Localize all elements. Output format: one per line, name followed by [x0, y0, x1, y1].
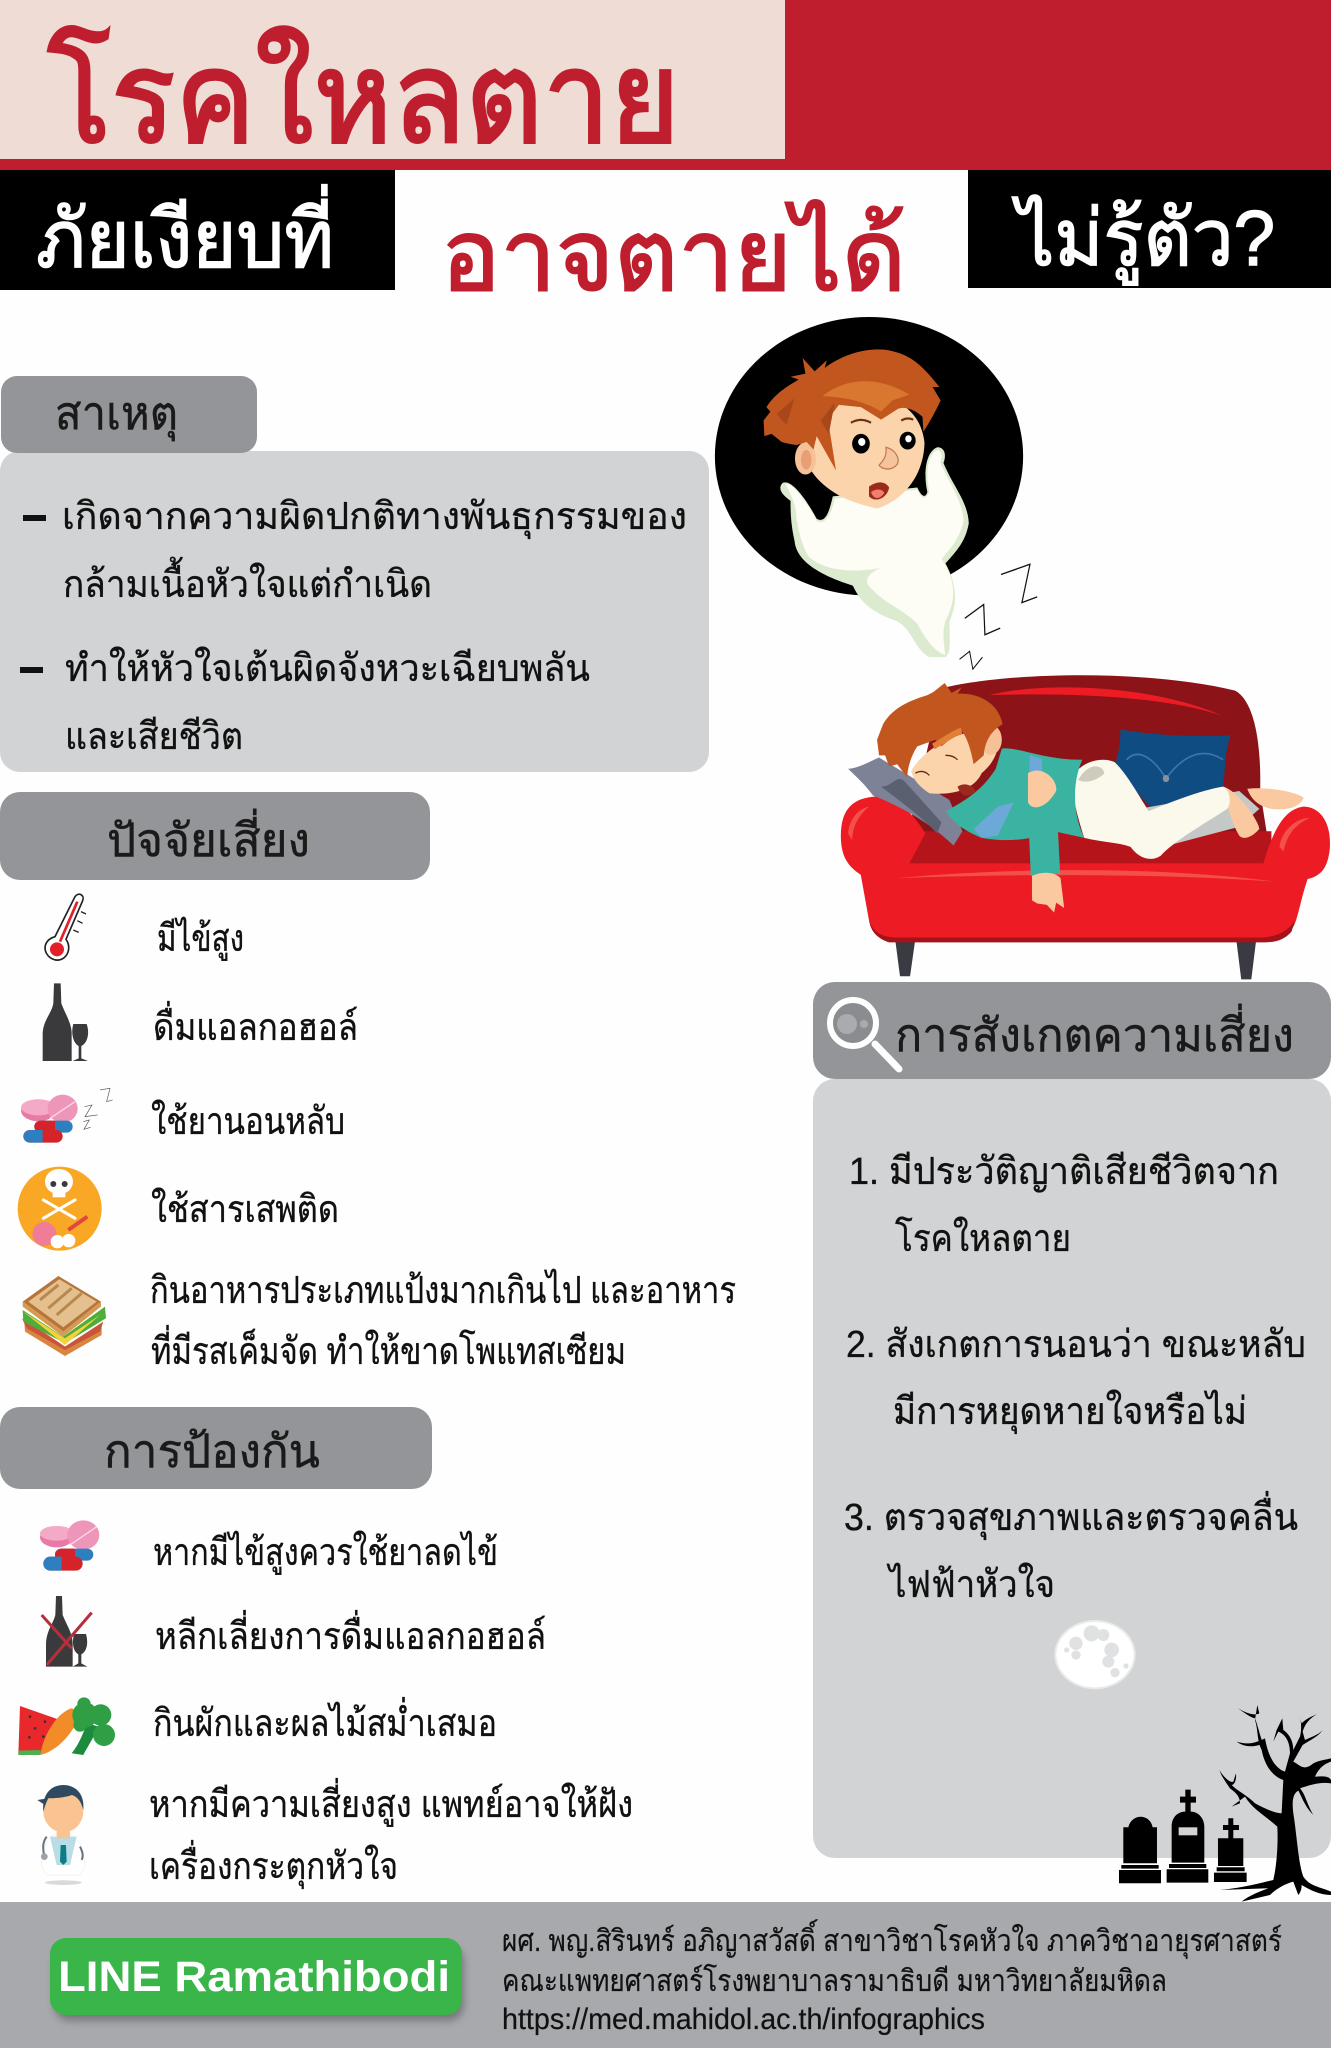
illustration: graves and dead tree	[1119, 1705, 1331, 1902]
icon: sandwich	[22, 1276, 106, 1356]
heading tab: observing risk	[813, 982, 1331, 1079]
item 1: 1. มีประวัติญาติเสียชีวิตจาก	[849, 1151, 1279, 1193]
illustration: ghost leaving head	[715, 317, 1037, 669]
title: โรคใหลตาย	[47, 27, 680, 170]
credits	[502, 1919, 1282, 2036]
risk: high fever: มีไข้สูง	[157, 917, 244, 961]
cause 1	[23, 496, 687, 606]
risk: alcohol: ดื่มแอลกอฮอล์	[153, 1001, 358, 1049]
risk: sleeping pills: ใช้ยานอนหลับ	[151, 1100, 345, 1143]
cause 2: และเสียชีวิต	[65, 716, 243, 758]
item 2	[846, 1324, 1306, 1434]
icon: no alcohol	[42, 1596, 92, 1667]
icon: thermometer	[45, 894, 86, 960]
cause 1: เกิดจากความผิดปกติทางพันธุกรรมของ	[62, 496, 687, 539]
item 2: มีการหยุดหายใจหรือไม่	[893, 1390, 1247, 1434]
icon: pills	[40, 1520, 99, 1571]
credits: https://med.mahidol.ac.th/infographics	[502, 2003, 985, 2036]
item 1	[849, 1151, 1279, 1260]
heading tab: prevention: การป้องกัน	[104, 1425, 320, 1477]
icon: bottle and glass	[43, 983, 88, 1061]
credits: คณะแพทยศาสตร์โรงพยาบาลรามาธิบดี มหาวิทยาลัยมหิดล	[502, 1963, 1167, 1998]
heading tab: risk factors	[0, 792, 430, 880]
subtitle band	[0, 170, 1331, 312]
prevention: fruit and vegetables: กินผักและผลไม้สม่ำเสมอ	[153, 1697, 497, 1745]
prevention: implant defibrillator	[149, 1778, 633, 1889]
footer band	[0, 1902, 1331, 2048]
heading tab: risk factors: ปัจจัยเสี่ยง	[107, 808, 310, 866]
prevention: implant defibrillator: เครื่องกระตุกหัวใจ	[149, 1840, 398, 1889]
icon: drugs skull	[18, 1167, 102, 1251]
item 2: 2. สังเกตการนอนว่า ขณะหลับ	[846, 1324, 1306, 1366]
icon: magnifier	[830, 1000, 899, 1069]
item 1: โรคใหลตาย	[895, 1216, 1071, 1260]
item 3	[844, 1491, 1298, 1606]
item 3: ไฟฟ้าหัวใจ	[886, 1563, 1055, 1606]
subtitle right: ไม่รู้ตัว?	[1011, 194, 1275, 285]
heading tab: prevention	[0, 1407, 432, 1489]
icon: doctor	[37, 1785, 85, 1885]
LINE Ramathibodi button	[50, 1938, 464, 2021]
heading tab: causes	[1, 376, 257, 453]
prevention: fever medicine: หากมีไข้สูงควรใช้ยาลดไข้	[153, 1531, 498, 1575]
illustration: boy asleep on red sofa	[841, 675, 1330, 979]
subtitle centre: อาจตายได้	[441, 200, 906, 312]
panel: observing risk	[813, 982, 1331, 1858]
heading tab: causes: สาเหตุ	[55, 387, 178, 442]
risk: starchy and salty food	[150, 1269, 736, 1373]
cause 1: กล้ามเนื้อหัวใจแต่กำเนิด	[63, 556, 432, 606]
LINE Ramathibodi button: LINE Ramathibodi	[58, 1953, 450, 2001]
icon: moon	[1054, 1620, 1136, 1689]
icon: fruit and vegetables	[18, 1697, 115, 1755]
panel: causes	[0, 376, 709, 772]
item 3: 3. ตรวจสุขภาพและตรวจคลื่น	[844, 1491, 1298, 1540]
cause 2	[20, 647, 590, 758]
icon: sleeping pills	[21, 1088, 113, 1143]
risk: starchy and salty food: กินอาหารประเภทแป้งมากเกินไป และอาหาร	[150, 1269, 736, 1312]
risk: drugs: ใช้สารเสพติด	[151, 1188, 339, 1231]
risk: starchy and salty food: ที่มีรสเค็มจัด ทำให้ขาดโพแทสเซียม	[151, 1325, 626, 1373]
prevention: implant defibrillator: หากมีความเสี่ยงสูง แพทย์อาจให้ฝัง	[149, 1778, 633, 1827]
cause 2: ทำให้หัวใจเต้นผิดจังหวะเฉียบพลัน	[65, 647, 590, 690]
heading tab: observing risk: การสังเกตความเสี่ยง	[895, 1003, 1294, 1061]
prevention: avoid alcohol: หลีกเลี่ยงการดื่มแอลกอฮอล์	[155, 1610, 546, 1658]
header: title band	[0, 0, 1331, 170]
subtitle left: ภัยเงียบที่	[36, 185, 334, 284]
